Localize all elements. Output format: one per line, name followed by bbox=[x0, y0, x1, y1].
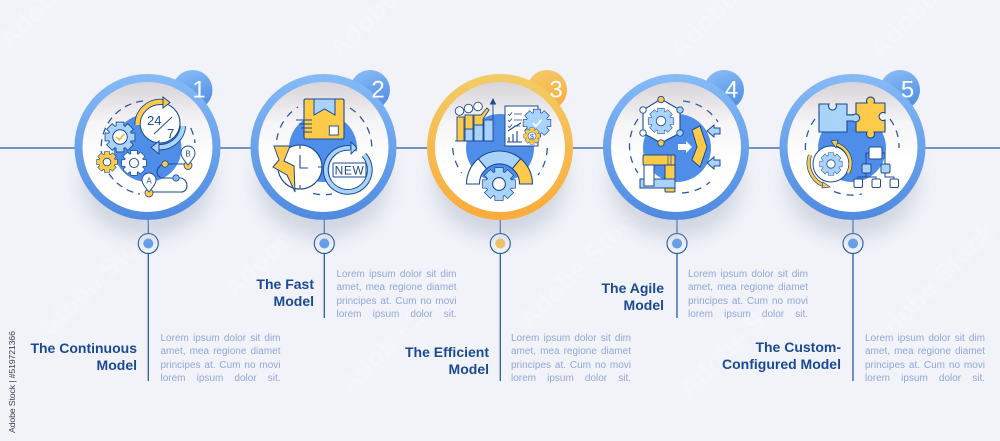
number 3: 3 bbox=[549, 76, 563, 104]
heading: The Efficient Model: The Efficient bbox=[405, 344, 489, 360]
icon: report with gears: $ bbox=[530, 132, 534, 141]
text block: step 3: principes at. Cum no movi bbox=[511, 360, 631, 371]
text block: step 4: principes at. Cum no movi bbox=[688, 296, 808, 307]
timeline stem 1 bbox=[147, 215, 149, 381]
text block: step 5 bbox=[865, 333, 985, 384]
number 5: 5 bbox=[901, 76, 914, 104]
text block: step 5: Lorem ipsum dolor sit dim bbox=[865, 333, 985, 344]
text block: step 4: Lorem ipsum dolor sit dim bbox=[688, 269, 808, 280]
stock id text: Adobe Stock | #519721366 bbox=[7, 331, 17, 433]
icon: clock and lightning bbox=[273, 145, 322, 192]
icon: parcel box bbox=[296, 99, 344, 139]
text: Adobe Stock bbox=[513, 196, 652, 334]
node marker 4 bbox=[667, 234, 687, 254]
text block: step 3: lorem ipsum dolor sit. bbox=[511, 373, 631, 384]
icon: team and growth bars bbox=[455, 99, 496, 141]
heading: The Continuous Model bbox=[30, 340, 137, 372]
text block: step 4: amet, mea regione diamet bbox=[688, 282, 808, 293]
text: Adobe Stock bbox=[863, 216, 1000, 354]
text block: step 2: amet, mea regione diamet bbox=[336, 282, 456, 293]
text block: step 2 bbox=[336, 269, 456, 320]
text block: step 2: lorem ipsum dolor sit. bbox=[336, 309, 456, 320]
icon: new badge with arrow: NEW bbox=[335, 164, 364, 178]
icon: gear with cycle arrows bbox=[809, 140, 850, 188]
heading: The Continuous Model: Model bbox=[97, 356, 137, 372]
heading: The Agile Model: Model bbox=[624, 296, 664, 312]
number 2: 2 bbox=[371, 76, 385, 104]
icon: route with pins bbox=[142, 146, 195, 197]
text: Adobe Stock bbox=[673, 266, 812, 404]
number 1: 1 bbox=[192, 76, 206, 104]
icon: report with gears bbox=[505, 106, 550, 146]
timeline stem 5 bbox=[852, 215, 854, 381]
node marker 5 bbox=[843, 234, 863, 254]
icon: 24/7 clock: 24 bbox=[147, 113, 161, 128]
text block: step 2: principes at. Cum no movi bbox=[336, 296, 456, 307]
heading: The Fast Model: Model bbox=[274, 292, 314, 308]
icon: 24/7 clock: 7 bbox=[167, 126, 174, 141]
panel: step 5 circle bbox=[780, 70, 926, 238]
heading: The Custom-Configured Model: Configured Model bbox=[722, 356, 841, 372]
text block: step 1: Lorem ipsum dolor sit dim bbox=[160, 333, 280, 344]
icon: hierarchy chart bbox=[854, 147, 898, 188]
text: Adobe Stock bbox=[218, 166, 357, 304]
heading: The Continuous Model: The Continuous bbox=[30, 340, 137, 356]
heading: The Agile Model: The Agile bbox=[602, 280, 664, 296]
timeline stem 4 bbox=[676, 215, 678, 318]
heading: The Efficient Model: Model bbox=[449, 360, 489, 376]
heading: The Fast Model: The Fast bbox=[256, 276, 314, 292]
icon: route with pins: A bbox=[146, 176, 152, 186]
icon: new badge with arrow bbox=[326, 142, 370, 192]
text block: step 4: lorem ipsum dolor sit. bbox=[688, 309, 808, 320]
icon: yellow gear bbox=[97, 152, 117, 172]
heading: The Efficient Model bbox=[405, 344, 489, 376]
text: Adobe Stock bbox=[333, 261, 472, 399]
text block: step 1: lorem ipsum dolor sit. bbox=[160, 373, 280, 384]
node marker 1 bbox=[138, 234, 158, 254]
panel: step 1 circle bbox=[74, 70, 220, 238]
panel: step 3 circle bbox=[427, 70, 573, 238]
text block: step 1: amet, mea regione diamet bbox=[160, 346, 280, 357]
panel: step 4 circle bbox=[603, 70, 749, 238]
icon: joined hands bbox=[640, 155, 675, 192]
timeline stem 2 bbox=[323, 215, 325, 318]
text block: step 5: lorem ipsum dolor sit. bbox=[865, 373, 985, 384]
text block: step 3 bbox=[511, 333, 631, 384]
text block: step 1 bbox=[160, 333, 280, 384]
text block: step 3: Lorem ipsum dolor sit dim bbox=[511, 333, 631, 344]
horizontal timeline bbox=[0, 147, 1000, 149]
text block: step 1: principes at. Cum no movi bbox=[160, 360, 280, 371]
number 4: 4 bbox=[725, 76, 738, 104]
panel: step 2 circle bbox=[250, 70, 396, 238]
heading: The Custom-Configured Model: The Custom- bbox=[755, 339, 841, 355]
text block: step 3: amet, mea regione diamet bbox=[511, 346, 631, 357]
heading: The Custom-Configured Model bbox=[722, 339, 841, 372]
icon: puzzle pieces bbox=[819, 97, 885, 138]
node marker 2 bbox=[314, 234, 334, 254]
heading: The Agile Model bbox=[602, 280, 664, 312]
icon: route with pins: B bbox=[185, 150, 191, 158]
heading: The Fast Model bbox=[256, 276, 314, 308]
icon: 24/7 clock bbox=[137, 97, 183, 154]
node marker 3 bbox=[490, 234, 510, 254]
icon: gauge with gear bbox=[466, 151, 532, 200]
timeline stem 3 bbox=[499, 215, 501, 381]
text block: step 4 bbox=[688, 269, 808, 320]
text block: step 2: Lorem ipsum dolor sit dim bbox=[336, 269, 456, 280]
icon: white gear bbox=[122, 151, 146, 175]
text: Adobe Stock bbox=[28, 211, 167, 349]
text block: step 5: amet, mea regione diamet bbox=[865, 346, 985, 357]
icon: check gear bbox=[106, 122, 134, 152]
icon: hexagon network gear bbox=[640, 96, 683, 146]
text block: step 5: principes at. Cum no movi bbox=[865, 360, 985, 371]
icon: shield arc with arrows bbox=[678, 125, 720, 169]
